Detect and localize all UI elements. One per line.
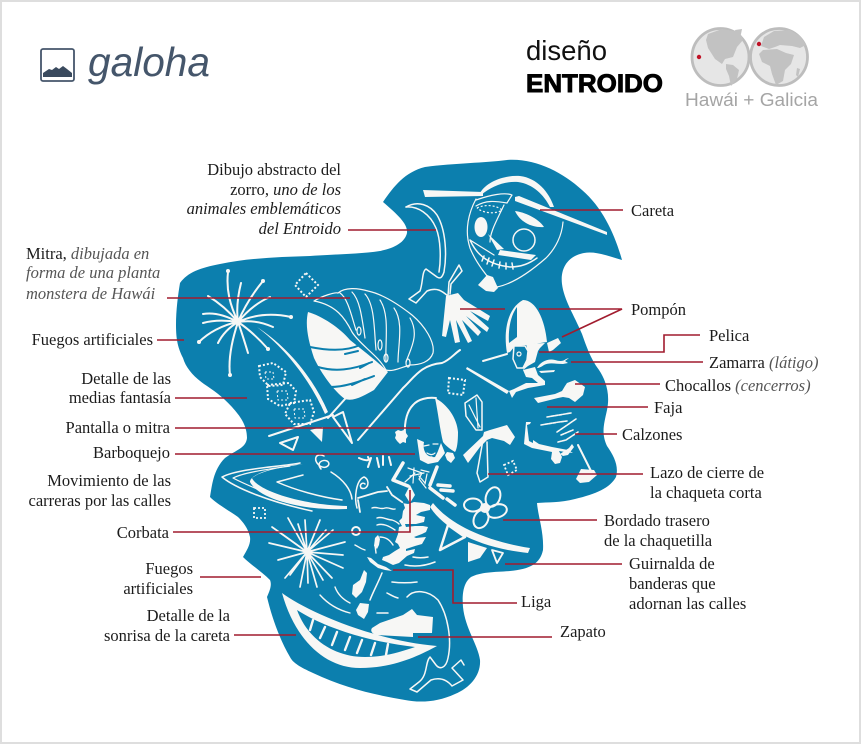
label: sonrisa — [104, 606, 231, 645]
label: zorro: zorro, uno de los — [230, 180, 341, 199]
calzones — [524, 422, 573, 464]
logo: galoha — [41, 39, 210, 85]
icon: upper dancer — [466, 300, 597, 483]
icon: curved stalk — [257, 327, 328, 414]
label: pantalla: Pantalla o mitra — [66, 418, 171, 437]
label: fuegos artificiales: Fuegos artificiales — [32, 330, 153, 349]
label: chocallos: Chocallos (cencerros) — [665, 376, 811, 395]
label: careta: Careta — [631, 201, 675, 220]
wordmark: galoha — [88, 39, 210, 85]
leg — [352, 557, 435, 619]
label: guirnalda: adornan las calles — [629, 594, 746, 613]
face — [513, 343, 545, 370]
label: medias: medias fantasía — [69, 388, 172, 407]
torso — [358, 456, 455, 512]
label: guirnalda — [629, 554, 746, 613]
label: zamarra: Zamarra (látigo) — [709, 353, 818, 372]
label: faja: Faja — [654, 398, 683, 417]
panel: blue illustration shape — [176, 160, 622, 702]
arm squiggles — [355, 507, 399, 553]
label: pelica: Pelica — [709, 326, 750, 345]
label: zorro — [187, 160, 341, 238]
icon: firework large — [197, 269, 293, 377]
icon: thin arcs — [320, 587, 350, 613]
icon: lower dancer — [352, 398, 458, 619]
label: movimiento: carreras por las calles — [29, 491, 171, 510]
label: mitra: forma de una planta — [26, 263, 160, 282]
label: mitra: monstera de Hawái — [26, 284, 156, 303]
icon: careta mask — [423, 176, 607, 292]
callout lines — [157, 210, 703, 637]
label: lazo: Lazo de cierre de — [650, 463, 764, 482]
icon: firework lower — [269, 518, 345, 587]
label: zorro: animales emblemáticos — [187, 199, 341, 218]
heading: diseño ENTROIDO — [526, 35, 663, 98]
icon: dotted diamond — [295, 273, 318, 297]
label: lazo: la chaqueta corta — [650, 483, 762, 502]
icon: stocking pattern — [259, 363, 314, 424]
bird — [537, 358, 569, 373]
icon: fox drawing — [406, 204, 462, 303]
label: sonrisa: sonrisa de la careta — [104, 626, 231, 645]
icon: fox foot lower — [407, 592, 464, 692]
icon: image frame — [41, 49, 74, 81]
label: movimiento: Movimiento de las — [47, 471, 171, 490]
body and whip — [466, 354, 545, 398]
label: mitra — [26, 244, 160, 303]
label: guirnalda: Guirnalda de — [629, 554, 715, 573]
label: mitra: Mitra, dibujada en — [26, 244, 149, 263]
label: zorro: Dibujo abstracto del — [207, 160, 341, 179]
faja squiggles — [541, 413, 578, 442]
label: calzones: Calzones — [622, 425, 682, 444]
label: pompon: Pompón — [631, 300, 686, 319]
icon: monstera leaf mitre — [307, 289, 433, 418]
heading: diseño ENTROIDO: ENTROIDO — [526, 70, 663, 98]
label: fuegos 2 — [123, 559, 193, 598]
garland sleeve — [382, 502, 430, 565]
icon: bow lazo — [448, 378, 517, 482]
icon: zapato shoe — [371, 609, 433, 637]
label: liga: Liga — [521, 592, 552, 611]
label: sonrisa: Detalle de la — [147, 606, 231, 625]
chocallos — [534, 380, 585, 403]
label: bordado: de la chaquetilla — [604, 531, 713, 550]
label: bordado — [604, 511, 713, 550]
icon: pompon fan — [442, 293, 490, 343]
icon: thin branch — [358, 350, 460, 440]
label: lazo — [650, 463, 764, 502]
label: zapato: Zapato — [560, 622, 606, 641]
label: barboquejo: Barboquejo — [93, 443, 170, 462]
label: guirnalda: banderas que — [629, 574, 716, 593]
icon: movement swirl — [222, 455, 368, 535]
icon: bunting upper — [269, 412, 352, 450]
label: movimiento — [29, 471, 171, 510]
label: medias: Detalle de las — [81, 369, 171, 388]
label: zorro: del Entroido — [259, 219, 341, 238]
hat — [395, 398, 458, 463]
label: bordado: Bordado trasero — [604, 511, 710, 530]
label: fuegos 2: artificiales — [123, 579, 193, 598]
icon: bunting lower — [430, 503, 530, 563]
icon: embroidered flower — [464, 485, 508, 531]
hat — [506, 300, 561, 353]
label: corbata: Corbata — [117, 523, 170, 542]
heading: diseño ENTROIDO: diseño — [526, 35, 607, 66]
label: fuegos 2: Fuegos — [145, 559, 193, 578]
face and beard — [417, 439, 445, 464]
icon: globes Hawái + Galicia — [685, 28, 819, 110]
icon: globes Hawái + Galicia: Hawái + Galicia — [685, 90, 819, 110]
icon: sonrisa smile — [282, 593, 437, 668]
label: medias — [69, 369, 172, 407]
